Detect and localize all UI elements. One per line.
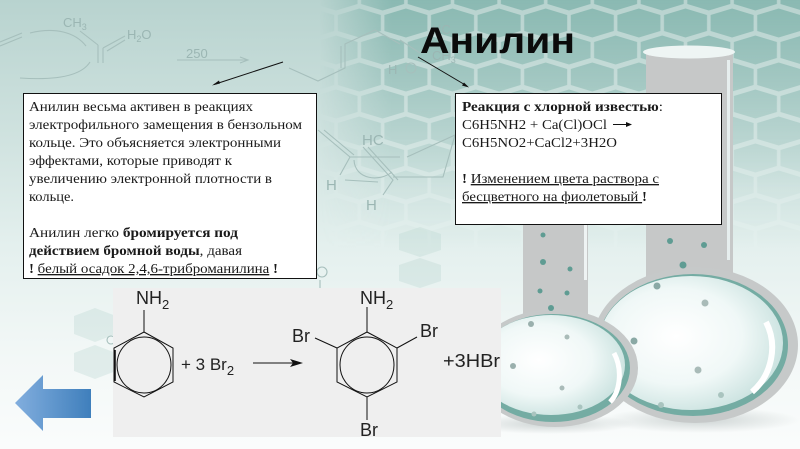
background molecule labels: 2	[136, 34, 141, 44]
reaction equation: C6H5NO2+CaCl2+3H2O	[462, 135, 617, 150]
text block: aniline activity: Анилин весьма активен в реакциях	[29, 99, 253, 114]
text block: aniline activity	[29, 99, 303, 204]
panel: bleaching powder reaction	[456, 94, 722, 224]
text block: aniline activity: электрофильного замещения в бензольном	[29, 117, 303, 132]
reaction result: ! Изменением цвета раствора с	[462, 171, 659, 186]
reaction result	[462, 171, 659, 204]
background molecule labels: 3	[82, 22, 87, 32]
reaction equation: C6H5NH2 + Ca(Cl)OCl	[462, 117, 607, 132]
background molecule labels: H	[366, 197, 377, 214]
label: NH2 left: 2	[162, 297, 169, 312]
reaction equation	[462, 117, 632, 150]
text block: bromination	[29, 225, 278, 276]
label: plus 3Br2: 2	[227, 363, 234, 378]
label: Br right: Br	[420, 321, 438, 341]
aniline structure	[114, 310, 173, 397]
text block: bromination: действием бромной воды , давая	[29, 243, 242, 258]
chart: bromination reaction formula	[113, 288, 501, 440]
background molecule labels	[63, 15, 456, 214]
background molecule labels: H	[388, 62, 397, 77]
background molecule labels: 3	[451, 55, 456, 65]
label: plus 3HBr: +3HBr	[443, 351, 500, 371]
reaction heading: Реакция с хлорной известью :	[462, 99, 663, 114]
label: plus 3Br2: + 3 Br	[181, 355, 227, 374]
text block: bromination: ! белый осадок 2,4,6-триброманилина !	[29, 261, 278, 276]
label: NH2 right: 2	[386, 297, 393, 312]
background molecule labels: 250	[186, 46, 208, 61]
background molecule labels: O	[141, 27, 152, 42]
text block: aniline activity: увеличению электронной плотности в	[29, 171, 272, 186]
arrow: to right text box	[418, 57, 469, 88]
label: Br left: Br	[292, 326, 310, 346]
background molecule labels: CH	[432, 48, 451, 63]
tribromoaniline structure	[315, 307, 417, 420]
background molecule drawings	[0, 30, 455, 344]
illustration: left flask	[465, 100, 638, 434]
text block: aniline activity: эффектами, которые приводят к	[29, 153, 232, 168]
background molecule labels: HC	[432, 22, 451, 37]
reaction arrow	[253, 359, 303, 367]
illustration: right flask	[592, 46, 800, 433]
text block: aniline activity: кольце.	[29, 189, 74, 204]
label: NH2 right: NH	[360, 288, 386, 308]
background molecule labels: HC	[362, 132, 384, 149]
label: Br bottom: Br	[360, 420, 378, 440]
text block: bromination: Анилин легко бромируется под	[29, 225, 238, 240]
background molecule labels: H	[326, 177, 337, 194]
text block: aniline activity: кольце. Это объясняется электронными	[29, 135, 281, 150]
panel: aniline bromination text	[24, 94, 316, 278]
background molecule labels: CH	[63, 15, 82, 30]
background molecule labels: H	[127, 27, 136, 42]
arrow: to left text box	[212, 62, 283, 86]
title: Анилин	[420, 20, 575, 61]
label: NH2 left: NH	[136, 288, 162, 308]
reaction result: бесцветного на фиолетовый !	[462, 189, 647, 204]
icon: back arrow	[15, 375, 91, 431]
